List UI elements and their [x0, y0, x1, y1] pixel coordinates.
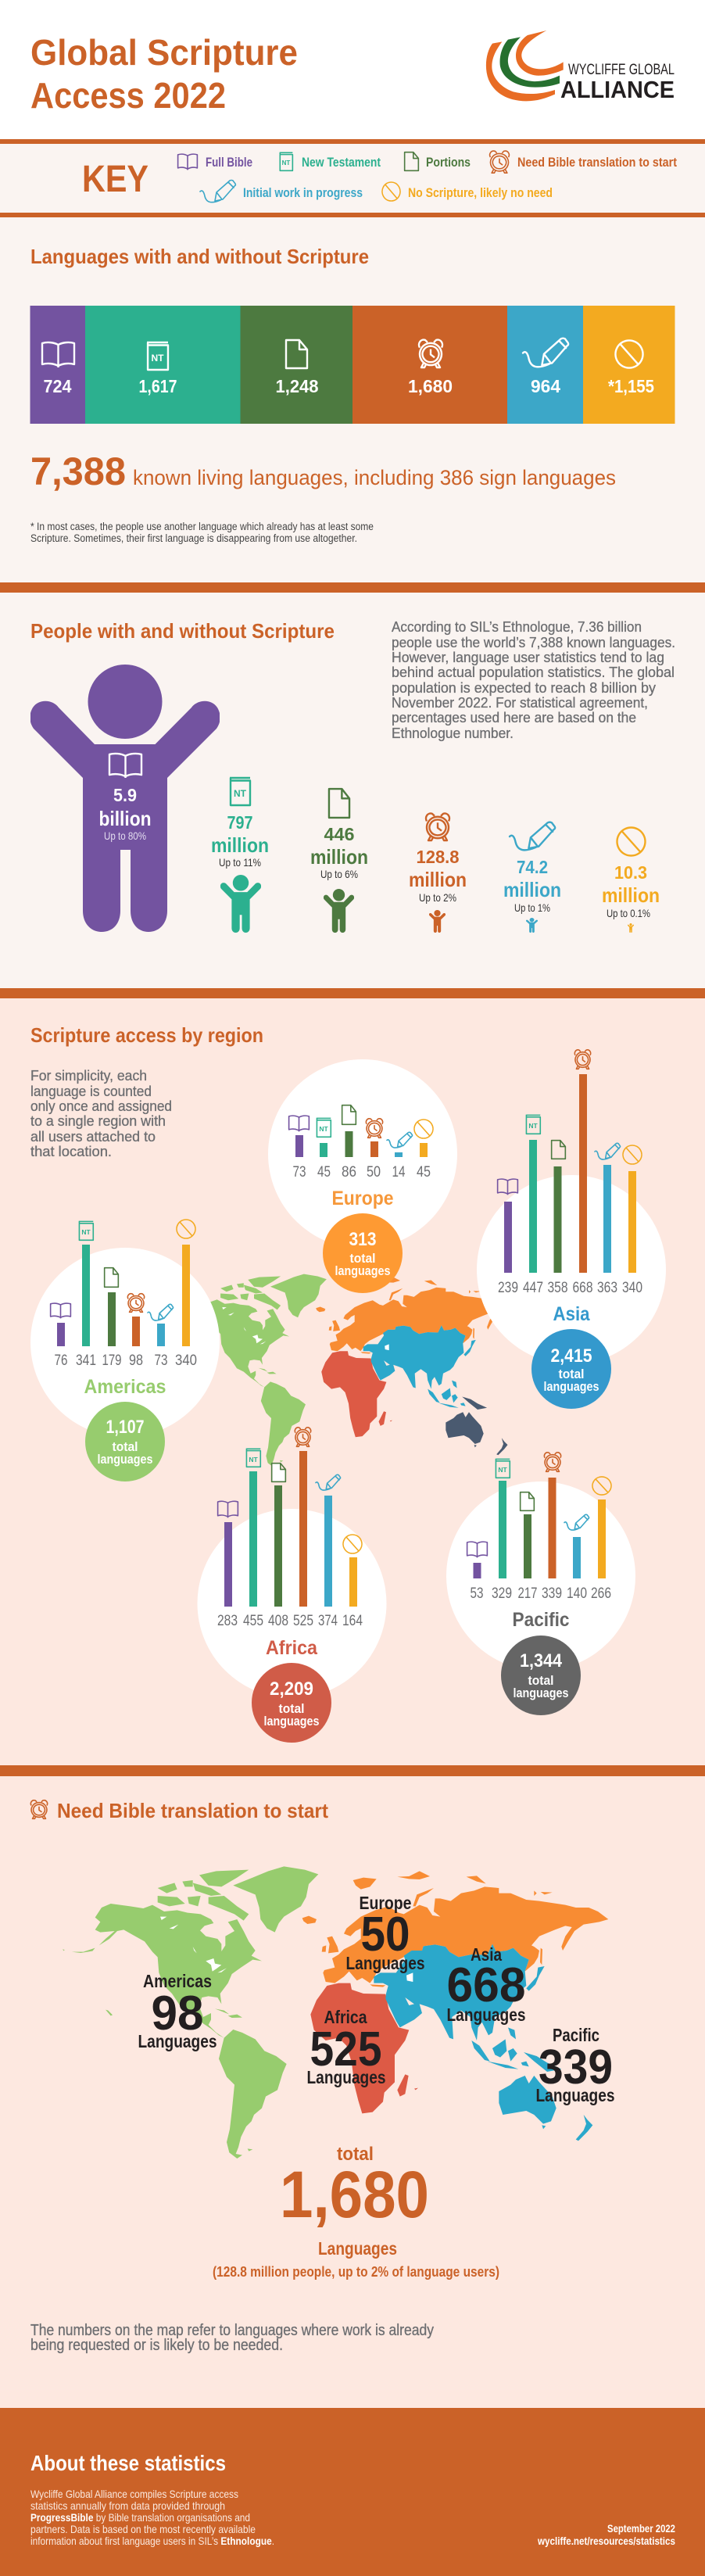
region: Asia: total	[558, 1367, 585, 1381]
key: need translation: Need Bible translation to start	[517, 155, 677, 170]
map label: Americas 98: 98	[152, 1987, 203, 2040]
column: portions people: 446	[324, 824, 355, 844]
region: Americas: NT	[81, 1228, 91, 1236]
key: full bible: Full Bible	[206, 155, 252, 170]
map label: Asia 668	[447, 1944, 525, 2025]
region: Americas: 179	[102, 1352, 122, 1369]
region: Europe: languages	[335, 1263, 391, 1278]
total known languages	[30, 450, 616, 493]
region: Africa: NT	[249, 1456, 258, 1464]
region: Asia: 340	[622, 1280, 642, 1296]
map label: Pacific 339: Pacific	[553, 2025, 599, 2045]
explanatory paragraph: all users attached to	[30, 1129, 156, 1145]
key: portions: Portions	[426, 155, 471, 170]
region: Africa: Africa	[266, 1637, 318, 1659]
footer body: Wycliffe Global Alliance compiles Scripture access	[30, 2488, 238, 2500]
column: portions people: Up to 6%	[320, 868, 358, 880]
region: Asia: 668	[572, 1280, 592, 1296]
region: Europe: total	[350, 1251, 375, 1266]
explanatory paragraph	[392, 619, 675, 741]
explanatory paragraph: For simplicity, each	[30, 1068, 147, 1084]
region: Americas: 73	[155, 1352, 167, 1369]
region: Pacific: 266	[591, 1585, 611, 1602]
column: portions people	[310, 789, 368, 933]
footer body	[30, 2488, 274, 2547]
heading with clock icon: Need Bible translation to start	[57, 1799, 328, 1822]
explanatory paragraph: According to SIL’s Ethnologue, 7.36 billion	[392, 619, 642, 635]
segmented bar: *1,155	[608, 376, 654, 396]
explanatory paragraph: Ethnologue number.	[392, 726, 514, 741]
region: Asia: 447	[523, 1280, 543, 1296]
region: Americas: Americas	[84, 1376, 166, 1398]
total callout: (128.8 million people, up to 2% of language users)	[213, 2264, 499, 2280]
footnote: * In most cases, the people use another language which already has at least some	[30, 521, 374, 532]
footer body: ProgressBible by Bible translation organisations and	[30, 2511, 250, 2524]
map label: Asia 668: Asia	[471, 1944, 502, 1965]
region: Europe: 73	[292, 1164, 306, 1181]
segmented bar	[30, 306, 675, 424]
region: Europe: Europe	[331, 1188, 394, 1209]
region: Europe: 86	[342, 1164, 356, 1181]
total callout: Languages	[318, 2238, 397, 2259]
region: Americas	[30, 1220, 220, 1481]
region: Pacific: languages	[513, 1686, 569, 1700]
map label: Americas 98: Americas	[143, 1971, 212, 1991]
title	[30, 32, 298, 116]
total known languages: known living languages, including 386 sign languages	[133, 466, 616, 489]
panel: about these statistics	[0, 2408, 705, 2576]
key: new testament	[280, 152, 381, 170]
region: Africa: 408	[268, 1613, 288, 1629]
explanatory paragraph: that location.	[30, 1144, 112, 1159]
segmented bar: 1,617	[139, 376, 177, 396]
column: new testament people: million	[211, 833, 269, 857]
column: need translation people: Up to 2%	[419, 891, 456, 904]
panel: key	[82, 151, 677, 202]
map label: Africa 525	[306, 2007, 386, 2087]
heading: Scripture access by region	[30, 1023, 263, 1047]
key: portions	[405, 152, 471, 170]
date and website	[537, 2522, 675, 2547]
explanatory paragraph: to a single region with	[30, 1113, 166, 1129]
explanatory paragraph: people use the world’s 7,388 known languages.	[392, 635, 675, 650]
big person: full bible: Up to 80%	[104, 829, 146, 842]
map note: The numbers on the map refer to languages where work is already	[30, 2322, 434, 2339]
region: Africa: 525	[293, 1613, 313, 1629]
region: Europe: 14	[392, 1164, 406, 1181]
total known languages: 7,388	[30, 450, 126, 493]
total callout: 1,680	[280, 2158, 429, 2231]
date and website: September 2022	[607, 2522, 675, 2535]
explanatory paragraph: November 2022. For statistical agreement,	[392, 695, 648, 711]
map note	[30, 2322, 434, 2354]
region: Pacific	[446, 1453, 635, 1715]
region: Pacific: 329	[492, 1585, 512, 1602]
key: new testament: New Testament	[302, 155, 381, 170]
segmented bar: 1,248	[275, 376, 319, 396]
footnote	[30, 521, 374, 544]
big person: full bible	[30, 665, 220, 932]
panel: people with and without scripture	[30, 619, 675, 933]
world map: need translation	[63, 1866, 608, 2159]
key heading: KEY	[82, 159, 149, 200]
region: Africa: languages	[264, 1714, 319, 1729]
column: new testament people: Up to 11%	[219, 856, 261, 869]
panel: languages with and without scripture	[30, 245, 675, 544]
region: Asia: 239	[498, 1280, 518, 1296]
region: Americas: 98	[129, 1352, 143, 1369]
column: no scripture people	[602, 827, 660, 933]
region: Asia: 2,415	[550, 1345, 592, 1367]
map label: Pacific 339: 339	[539, 2040, 613, 2094]
region: Pacific: 53	[471, 1585, 483, 1602]
title: Global Scripture	[30, 32, 298, 73]
segmented bar: 964	[531, 376, 560, 396]
region: Africa: 2,209	[270, 1679, 313, 1700]
footer body: information about first language users in SIL’s Ethnologue.	[30, 2535, 274, 2547]
panel: scripture access by region	[30, 1023, 666, 1743]
logo: Wycliffe Global Alliance: ALLIANCE	[560, 76, 675, 103]
title: Access 2022	[30, 75, 226, 116]
explanatory paragraph: only once and assigned	[30, 1098, 172, 1114]
explanatory paragraph: However, language user statistics tend to lag	[392, 650, 664, 665]
explanatory paragraph	[30, 1068, 172, 1159]
key: full bible	[178, 154, 252, 170]
region: Africa: 374	[318, 1613, 338, 1629]
map label: Europe 50: Languages	[345, 1953, 425, 1973]
region: Asia	[477, 1050, 666, 1409]
column: new testament people: NT	[234, 788, 247, 799]
heading: Languages with and without Scripture	[30, 245, 369, 268]
region: Americas: 76	[55, 1352, 67, 1369]
key: no scripture: No Scripture, likely no need	[408, 185, 553, 200]
region: Americas: 1,107	[106, 1417, 144, 1438]
column: initial work people: Up to 1%	[514, 901, 550, 914]
map note: being requested or is likely to be needed.	[30, 2337, 283, 2354]
map label: Americas 98	[138, 1971, 217, 2051]
explanatory paragraph: language is counted	[30, 1084, 152, 1099]
region: Europe: 45	[417, 1164, 431, 1181]
panel: need bible translation to start	[30, 1799, 614, 2354]
region: Pacific: Pacific	[513, 1609, 570, 1631]
region: Pacific: total	[528, 1673, 553, 1688]
key: new testament: NT	[282, 159, 290, 167]
region: Asia: languages	[544, 1379, 599, 1394]
region: Americas: total	[113, 1439, 138, 1454]
explanatory paragraph: population is expected to reach 8 billion by	[392, 680, 656, 696]
column: need translation people: million	[409, 868, 467, 891]
region: Africa: 455	[243, 1613, 263, 1629]
key: initial work	[200, 180, 363, 202]
total callout: total	[337, 2144, 374, 2165]
region: Asia: 358	[547, 1280, 567, 1296]
map label: Africa 525: 525	[310, 2022, 381, 2076]
region: Europe: NT	[319, 1125, 328, 1133]
map label: Europe 50: 50	[361, 1908, 410, 1962]
map label: Europe 50: Europe	[360, 1893, 411, 1913]
region: Asia: 363	[597, 1280, 617, 1296]
explanatory paragraph: percentages used here are based on the	[392, 710, 636, 726]
region: Americas: 341	[76, 1352, 96, 1369]
footer body: partners. Data is based on the most recently available	[30, 2523, 256, 2535]
footnote: Scripture. Sometimes, their first language is disappearing from use altogether.	[30, 532, 357, 544]
key: no scripture	[382, 182, 553, 201]
region: Asia: Asia	[553, 1303, 590, 1325]
region: Americas: 340	[175, 1352, 197, 1369]
column: initial work people: million	[503, 878, 561, 901]
explanatory paragraph: behind actual population statistics. The global	[392, 665, 675, 680]
total callout	[213, 2144, 499, 2280]
date and website: wycliffe.net/resources/statistics	[537, 2535, 675, 2547]
column: need translation people: 128.8	[416, 847, 460, 867]
map label: Europe 50	[345, 1893, 425, 1973]
column: initial work people	[503, 822, 561, 933]
heading: People with and without Scripture	[30, 619, 335, 643]
region: Africa: 283	[217, 1613, 238, 1629]
footer heading: About these statistics	[30, 2451, 226, 2475]
region: Pacific: 339	[542, 1585, 562, 1602]
map label: Asia 668: Languages	[447, 2005, 525, 2025]
region: Africa: total	[278, 1701, 305, 1716]
column: new testament people	[211, 778, 269, 933]
column: initial work people: 74.2	[517, 857, 548, 877]
footer body: statistics annually from data provided through	[30, 2499, 225, 2512]
segmented bar: 1,680	[408, 376, 453, 396]
column: no scripture people: 10.3	[614, 862, 647, 883]
column: new testament people: 797	[227, 812, 253, 833]
region: Pacific: 140	[567, 1585, 587, 1602]
region: Pacific: 217	[517, 1585, 538, 1602]
logo: Wycliffe Global Alliance	[486, 30, 675, 103]
map label: Africa 525: Languages	[306, 2067, 386, 2087]
key: initial work: Initial work in progress	[243, 185, 363, 200]
world map: regions	[158, 1274, 518, 1467]
region: Europe: 313	[349, 1229, 377, 1250]
column: need translation people	[409, 814, 467, 933]
region: Europe: 45	[317, 1164, 331, 1181]
region: Europe	[268, 1059, 457, 1293]
segmented bar: NT	[152, 353, 164, 364]
region: Europe: 50	[367, 1164, 381, 1181]
region: Africa: 164	[342, 1613, 363, 1629]
map label: Pacific 339	[536, 2025, 614, 2105]
big person: full bible: billion	[98, 807, 152, 830]
map label: Pacific 339: Languages	[536, 2085, 614, 2105]
region: Africa	[197, 1428, 386, 1743]
map label: Asia 668: 668	[447, 1958, 525, 2012]
segmented bar: 724	[44, 376, 72, 396]
map label: Africa 525: Africa	[324, 2007, 367, 2027]
region: Pacific: 1,344	[520, 1650, 563, 1671]
region: Asia: NT	[528, 1122, 538, 1130]
map label: Americas 98: Languages	[138, 2031, 217, 2051]
logo: Wycliffe Global Alliance: WYCLIFFE GLOBAL	[568, 62, 675, 78]
region: Americas: languages	[97, 1452, 153, 1467]
column: portions people: million	[310, 845, 368, 869]
big person: full bible: 5.9	[113, 785, 137, 805]
key: need translation	[490, 151, 677, 173]
column: no scripture people: Up to 0.1%	[607, 907, 650, 919]
region: Pacific: NT	[498, 1466, 507, 1474]
column: no scripture people: million	[602, 883, 660, 907]
